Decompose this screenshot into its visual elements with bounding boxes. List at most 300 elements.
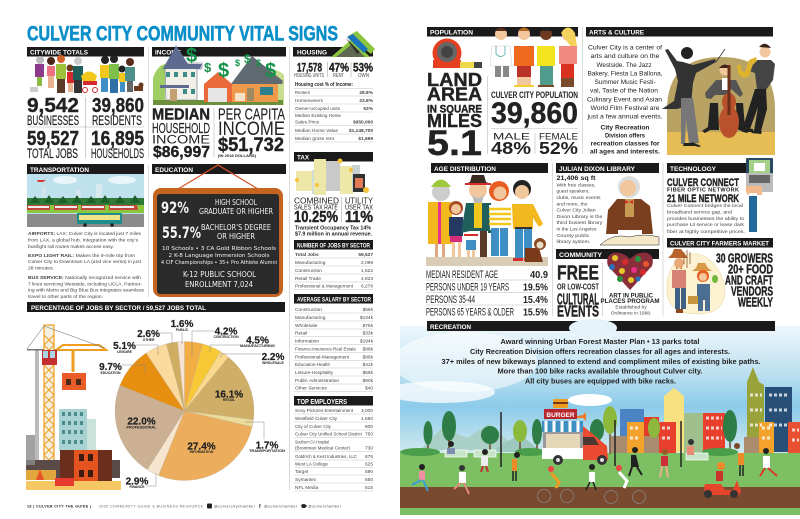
panel: julian dixon library (556, 163, 659, 245)
text: arts and culture: Summer Music Festi- (594, 79, 656, 86)
text: library details: guest speakers, (556, 188, 590, 194)
housing stats (294, 60, 373, 79)
panel: top employers: West LA College (295, 462, 328, 468)
chalkboard: ENROLLMENT 7,024 (185, 280, 253, 289)
panel: number of jobs by sector: NUMBER OF JOBS BY SECTOR (297, 242, 370, 250)
panel: top employers: TOP EMPLOYERS (297, 399, 347, 406)
panel: top employers: (Brontman Medical Center) (295, 446, 350, 452)
icon: houses and dollar signs: $ (256, 58, 261, 68)
panel: average salary by sector: $86k (363, 354, 374, 360)
stat: free or low-cost cultural events: EVENTS (557, 304, 599, 320)
panel: top employers: 590 (365, 469, 373, 475)
text: growers and vendors: WEEKLY (738, 294, 773, 310)
text: arts and culture (586, 44, 663, 156)
text: arts and culture: City Recreation (600, 124, 650, 132)
stat: land area: IN SQUARE (427, 104, 482, 116)
panel: top employers: 3,000 (361, 408, 373, 414)
panel: average salary by sector: $88k (363, 346, 374, 352)
text: art in public places: ART IN PUBLIC (609, 294, 654, 300)
housing table: Renters (295, 90, 311, 96)
age table: 15.4% (523, 294, 549, 306)
icon: reading man (600, 176, 659, 245)
tax stats: 11% (345, 209, 373, 226)
stat: culver city population: 39,860 (491, 97, 578, 130)
text: growers and vendors: AND CRAFT (725, 272, 773, 288)
text: arts and culture: Westside. The Jazz (596, 62, 652, 69)
panel: arts and culture (586, 27, 775, 156)
text: transportation details: Culver City to Downtown LA (and vice versa) in just (28, 259, 142, 265)
chalkboard: K-12 PUBLIC SCHOOL (183, 270, 257, 279)
people (412, 439, 777, 504)
stat: median household income: INCOME (152, 134, 210, 146)
stat: businesses (27, 94, 79, 128)
panel: top employers: Symantec (295, 477, 317, 483)
title: CULVER CITY COMMUNITY VITAL SIGNS (27, 22, 338, 46)
pie labels: INFORMATION (190, 450, 214, 454)
panel: top employers: 550 (365, 477, 373, 483)
icon: family group (30, 55, 144, 93)
text: library details: Culver City Julian (556, 208, 596, 214)
text: culver connect: CULVER CONNECT (667, 177, 739, 189)
stat: households (91, 128, 144, 161)
chalkboard: 55.7% (162, 223, 201, 242)
housing stats: RENT (333, 73, 344, 79)
housing table: 28.8% (359, 90, 374, 96)
text: culver connect: broadband service gap, and (667, 210, 732, 216)
stat: residents: 39,860 (92, 94, 144, 117)
panel: number of jobs by sector: Construction (295, 268, 322, 274)
pie leaders (122, 331, 264, 486)
text: arts and culture: arts and culture on the (590, 53, 660, 60)
pie labels: 1.7% (256, 440, 279, 452)
panel: number of jobs by sector: Total Jobs (295, 252, 319, 258)
chalkboard: GRADUATE OR HIGHER (199, 207, 273, 216)
text: transportation details: from LAX, a global hub. Integration with the city’s (28, 238, 139, 244)
panel: population: POPULATION (430, 30, 473, 36)
panel: recreation (385, 319, 800, 515)
pie labels: FINANCE (129, 485, 145, 489)
panel: top employers: Culver City Unified School District (295, 432, 363, 438)
stat: culver city population: 48% (491, 138, 531, 158)
panel: julian dixon library: JULIAN DIXON LIBRARY (559, 166, 636, 173)
panel: average salary by sector: $194k (360, 338, 374, 344)
panel: top employers: 515 (365, 485, 373, 491)
panel: income (152, 45, 286, 161)
housing table: Homeowners (295, 98, 324, 104)
panel: number of jobs by sector: Retail Trade (295, 276, 321, 282)
housing table: 23.8% (359, 98, 374, 104)
text: recreation details (442, 339, 761, 386)
pie labels: WHOLESALE (262, 361, 285, 365)
tax stats: SALES TAX RATE (294, 202, 338, 212)
text: library details: With free classes, (556, 182, 596, 188)
pie labels: MANUFACTURING (240, 344, 275, 348)
pie labels: EDUCATION (101, 371, 121, 375)
panel: average salary by sector (294, 294, 374, 392)
pie labels: OTHER (143, 338, 155, 342)
stat: culver city population: FEMALE (539, 132, 578, 142)
text: art in public places: PLACES PROGRAM (600, 299, 660, 305)
tax stats: COMBINED (294, 196, 339, 206)
panel: average salary by sector: $58k (363, 370, 374, 376)
stat: free or low-cost cultural events (557, 262, 599, 320)
illustration: musicians (662, 44, 775, 155)
housing table: Sales Price (295, 120, 320, 126)
stat: land area: MILES (427, 111, 482, 131)
text: arts and culture: Bakery, Fiesta La Ballona, (588, 70, 663, 78)
text: recreation details: More than 100 bike racks available throughout Culver city. (498, 368, 703, 376)
panel: technology (667, 158, 773, 235)
stat: land area (427, 69, 482, 163)
panel: education: EDUCATION (155, 167, 193, 174)
chalkboard: HIGH SCHOOL (215, 198, 258, 207)
icon: houses and dollar signs: $ (244, 52, 251, 66)
stat: total jobs (27, 128, 79, 161)
pie labels: 4.5% (246, 336, 269, 346)
panel: tax (294, 152, 374, 238)
panel: average salary by sector: $90k (363, 378, 374, 384)
text: arts and culture: World Film Festival are (590, 105, 660, 112)
panel: average salary by sector: Information (295, 338, 319, 344)
footer (27, 504, 342, 510)
panel: top employers: 625 (365, 462, 373, 468)
stat: free or low-cost cultural events: OR LOW-COST (557, 282, 599, 292)
panel: top employers: 1,550 (361, 416, 373, 422)
stat: culver city population: MALE (493, 132, 530, 142)
stat: median household income: HOUSEHOLD (152, 121, 210, 137)
panel: housing (293, 31, 375, 142)
pie labels: RETAIL (223, 398, 235, 402)
age table: PERSONS 35-44 (426, 294, 475, 306)
stat: land area: 5.1 (427, 124, 482, 163)
panel: top employers: NFL Media (295, 485, 319, 491)
panel: top employers (294, 396, 373, 491)
housing stats: 47% (329, 60, 349, 74)
text: culver connect: 21 MILE NETWORK (667, 193, 739, 205)
illustration: family (426, 175, 548, 266)
text: transportation details (28, 231, 145, 300)
panel: percentage of jobs by sector: PERCENTAGE OF JOBS BY SECTOR / 59,527 JOBS TOTAL (31, 305, 206, 312)
stat: median household income: MEDIAN (152, 106, 210, 124)
housing table: Median gross rent (295, 136, 335, 142)
icon: four residents (490, 28, 577, 87)
housing table: Owner-occupied units (295, 106, 341, 112)
text: arts and culture: Division offers (605, 132, 645, 140)
age table: 19.5% (523, 282, 549, 294)
text: library details: clubs, music events (556, 195, 601, 201)
panel: top employers: City of Culver City (295, 424, 332, 430)
text: transportation details: travel to other parts of the region. (28, 294, 103, 300)
icon: houses and dollar signs: $ (265, 60, 276, 82)
illustration: park scene (385, 319, 800, 515)
text: library details: and more, the (556, 202, 588, 208)
text: transportation details: EXPO LIGHT RAIL: Makes the 9-mile trip from (28, 253, 135, 259)
tax stats: UTILITY (345, 196, 374, 206)
pie labels: LEISURE (117, 350, 133, 354)
pie labels: 4.2% (215, 326, 238, 338)
panel: number of jobs by sector: 1,522 (361, 268, 373, 274)
illustration: farmers (667, 249, 725, 314)
tax stats (294, 196, 374, 238)
age table: PERSONS 65 YEARS & OLDER (426, 306, 514, 318)
icon: housing roofs (331, 31, 375, 57)
panel: education (152, 164, 286, 297)
icon: burger truck (542, 399, 608, 465)
footer: @culvercitychamber (214, 504, 256, 508)
text: culver connect: purchase Lit service or lease dark (667, 222, 745, 228)
text: recreation details: Award winning Urban Forest Master Plan • 13 parks total (500, 339, 700, 346)
panel: average salary by sector: Leisure-Hospitality (295, 370, 334, 376)
text: transportation details: 28 minutes. (28, 266, 54, 272)
housing stats: 53% (353, 60, 373, 74)
text: culver connect: fiber at highly competitive prices. (667, 229, 745, 235)
housing table: Median Existing Home (295, 113, 341, 119)
text: library details: third busiest library (556, 220, 603, 226)
panel: citywide totals (27, 47, 144, 161)
footer: @culverchamber (308, 504, 342, 508)
pie labels: 9.7% (99, 362, 122, 373)
panel: age distribution (426, 163, 549, 318)
panel: average salary by sector: Retail (295, 330, 307, 336)
panel: number of jobs by sector: Manufacturing (295, 260, 326, 266)
panel: recreation: RECREATION (430, 324, 471, 331)
panel: transportation (27, 164, 145, 300)
panel: average salary by sector: AVERAGE SALARY BY SECTOR (297, 296, 371, 304)
footer: 2020 COMMUNITY GUIDE & BUSINESS RESOURCE (99, 504, 204, 508)
icon: houses and dollar signs: $ (204, 60, 212, 75)
stat: per capita income: INCOME (218, 119, 285, 140)
stat: land area: AREA (427, 84, 482, 104)
pie labels: CONTRUCTION (213, 335, 239, 339)
pie labels: PROFESSIONAL (126, 426, 156, 430)
pie chart (115, 342, 254, 481)
text: library details (556, 176, 603, 245)
text: arts and culture: recreation classes for (590, 140, 660, 148)
panel: average salary by sector: $134k (360, 315, 374, 321)
stat: per capita income: $51,732 (218, 135, 284, 156)
stat: businesses: BUSINESSES (27, 113, 79, 128)
housing table: Median Home Value (295, 128, 338, 134)
panel: average salary by sector: Professional-Management (295, 354, 350, 360)
text: art in public places: Ordinance in 1988. (611, 310, 651, 316)
stat: per capita income: (IN 2018 DOLLARS) (218, 154, 256, 158)
panel: income: INCOME (155, 50, 182, 56)
footer: f (259, 504, 261, 510)
stat: residents (92, 94, 144, 128)
footer: @culverchamber (264, 504, 298, 508)
panel: top employers: 800 (365, 424, 373, 430)
icon: laptop and hand (746, 158, 773, 232)
text: library details: 21,406 sq ft (556, 176, 596, 182)
footer: 18 | CULVER CITY THE GUIDE | (27, 504, 91, 508)
stat: culver city population: CULVER CITY POPULATION (491, 90, 578, 100)
panel: arts and culture: ARTS & CULTURE (589, 30, 645, 36)
panel: number of jobs by sector: Professional & Management (295, 284, 354, 290)
chalkboard: 92% (161, 198, 189, 217)
stat: free or low-cost cultural events: FREE (557, 262, 599, 284)
panel: average salary by sector: Public Administration (295, 378, 339, 384)
stat: free or low-cost cultural events: CULTURAL (557, 292, 599, 308)
housing stats: HOUSING UNITS (294, 73, 324, 79)
panel: percentage of jobs by sector (26, 302, 286, 490)
panel: tax: TAX (297, 154, 310, 162)
panel: community: COMMUNITY (559, 252, 603, 259)
stat: per capita income (218, 106, 285, 158)
pie labels: 16.1% (215, 390, 243, 400)
panel: citywide totals: CITYWIDE TOTALS (30, 50, 89, 56)
housing stats: 17,578 (297, 60, 322, 74)
panel: average salary by sector: Finance-Insurance-Real Estate (295, 346, 356, 352)
panel: top employers: Westfield Culver City (295, 416, 338, 422)
panel: number of jobs by sector: 6,278 (361, 284, 373, 290)
chalkboard: BACHELOR’S DEGREE (201, 223, 271, 232)
housing table: $1,669 (358, 136, 373, 142)
illustration: transit scene (27, 174, 144, 227)
age table: 40.9 (530, 269, 548, 281)
stat: total jobs: TOTAL JOBS (27, 146, 78, 161)
stat: businesses: 9,542 (27, 94, 79, 117)
panel: transportation: TRANSPORTATION (30, 167, 89, 174)
housing table: $950,000 (353, 120, 373, 126)
panel: average salary by sector: Manufacturing (295, 315, 326, 321)
panel: average salary by sector: $33k (363, 330, 374, 336)
panel: age distribution: AGE DISTRIBUTION (434, 166, 496, 173)
icon: houses and dollar signs: $ (186, 45, 197, 67)
pie labels: 2.6% (137, 329, 160, 340)
stat: households: 16,895 (91, 128, 144, 150)
text: culver connect: FIBER OPTIC NETWORK (667, 188, 739, 194)
icon: houses and dollar signs: $ (218, 60, 229, 82)
housing table: 53% (363, 106, 374, 112)
panel: population (427, 27, 578, 163)
panel: top employers: 750 (365, 432, 373, 438)
text: library details: library system. (556, 239, 590, 245)
panel: average salary by sector: Wholesale (295, 323, 318, 329)
chalkboard: 4 CIF Championships • 35+ Pro Athlete Alumni (161, 260, 277, 266)
panel: top employers: Southern CA Hospital (295, 440, 329, 446)
panel: number of jobs by sector: 59,527 (358, 252, 373, 258)
icon: tape measure (432, 38, 482, 68)
icon: burger truck: BURGER (546, 412, 575, 419)
text: culver connect: provides businesses the ability to (667, 216, 744, 222)
age table: 15.5% (523, 306, 549, 318)
text: arts and culture: Culinary Event and Asian (587, 96, 662, 104)
age table (426, 269, 549, 318)
text: culver connect (667, 177, 745, 235)
stat: residents: RESIDENTS (92, 113, 142, 128)
age table: MEDIAN RESIDENT AGE (426, 269, 498, 281)
tax stats: 10.25% (294, 209, 338, 226)
panel: housing: HOUSING (297, 50, 327, 56)
housing table (294, 82, 374, 142)
text: transportation details: 7 lines servicing Westside, including UCLA. Partner- (28, 282, 142, 288)
stat: total jobs: 59,527 (27, 128, 79, 150)
pie labels: 27.4% (187, 442, 216, 452)
pie labels (99, 319, 286, 489)
pie labels: PUBLIC (176, 328, 189, 332)
text: art in public places (600, 294, 660, 316)
text: recreation details: All city buses are equipped with bike racks. (525, 378, 676, 386)
tax stats: USER TAX (345, 202, 373, 212)
tax stats: Transient Occupancy Tax 14% (295, 226, 372, 232)
stat: per capita income: PER CAPITA (218, 106, 285, 124)
panel: community (556, 249, 660, 320)
panel: technology: TECHNOLOGY (670, 166, 717, 173)
text: arts and culture: all ages and interests. (590, 148, 660, 156)
text: arts and culture: Culver City is a center of (588, 44, 662, 52)
panel: number of jobs by sector: 4,823 (361, 276, 373, 282)
text: growers and vendors: 20+ FOOD (728, 262, 773, 276)
chalkboard: 2 K-8 Language Immersion Schools (168, 253, 270, 259)
text: growers and vendors (716, 250, 773, 310)
stat: land area: LAND (427, 69, 482, 90)
stat: households: HOUSEHOLDS (91, 146, 144, 161)
panel: farmers market: CULVER CITY FARMERS MARKET (670, 240, 769, 248)
panel: number of jobs by sector: 2,099 (361, 260, 373, 266)
pie labels: 22.0% (127, 416, 156, 428)
panel: average salary by sector: Construction (295, 307, 322, 313)
panel: top employers: 675 (365, 454, 373, 460)
text: culver connect: Culver Connect bridges the local (667, 203, 743, 209)
chalkboard: 10 Schools • 3 CA Gold Ribbon Schools (162, 246, 276, 252)
housing table: $1,148,700 (349, 128, 373, 134)
text: transportation details: ing with Metro and Big Blue Bus integrates seamless (28, 288, 145, 294)
age table: PERSONS UNDER 19 YEARS (426, 282, 509, 294)
pie labels: 2.9% (126, 476, 149, 488)
pie labels: 2.2% (262, 352, 285, 363)
text: library details: County public (556, 233, 590, 239)
panel: top employers: Target (295, 469, 309, 475)
text: library details: in the Los Angeles (556, 226, 597, 232)
panel: top employers: Sony Pictures Entertainment (295, 408, 354, 414)
text: transportation details: BUS SERVICE: Nationally recognized service with (28, 275, 141, 281)
chalkboard (153, 188, 283, 297)
text: growers and vendors: VENDORS (731, 284, 773, 298)
housing table: Housing cost % of Income: (295, 82, 353, 88)
panel: top employers: Goldrich & Kest Industries, LLC (295, 454, 357, 460)
housing stats: OWN (358, 73, 369, 79)
icon: houses and dollar signs (153, 45, 284, 105)
panel: number of jobs by sector (294, 240, 373, 290)
panel: farmers market (667, 238, 773, 314)
text: library details: Dixon Library is the (556, 214, 603, 220)
chalkboard: OR HIGHER (217, 232, 255, 241)
text: recreation details: 37+ miles of new bikeways planned to extend and compliment miles of existing bike paths. (442, 359, 761, 366)
panel: average salary by sector: Education-Health (295, 362, 330, 368)
text: arts and culture: val, Taste of the Nation (590, 88, 658, 94)
text: art in public places: Established by (615, 304, 647, 310)
pie labels: TRANSPORTATION (249, 449, 286, 453)
icon: receipts and calculator (295, 158, 369, 195)
pie labels: 5.1% (113, 341, 136, 352)
panel: average salary by sector: $75k (363, 323, 374, 329)
tax stats: $7.9 million in annual revenue. (295, 232, 373, 238)
panel: average salary by sector: $41k (363, 362, 374, 368)
icon: mosaic heart (607, 253, 653, 290)
text: arts and culture: just a few annual events. (586, 114, 663, 120)
stat: culver city population (491, 90, 578, 158)
stat: culver city population: 52% (539, 138, 578, 158)
pie labels: 1.6% (171, 319, 194, 330)
stat: median household income: $86,997 (153, 144, 210, 161)
stat: median household income (152, 106, 210, 161)
text: recreation details: City Recreation Division offers recreation classes for all ages and interests. (470, 349, 730, 356)
panel: top employers: 730 (365, 446, 373, 452)
panel: average salary by sector: $56k (363, 307, 374, 313)
text: transportation details: AIRPORTS: LAX: Culver City is located just 7 miles (28, 231, 142, 237)
icon: houses and dollar signs: $ (235, 58, 240, 68)
text: transportation details: bus/light rail routes makes access easy. (28, 244, 114, 250)
